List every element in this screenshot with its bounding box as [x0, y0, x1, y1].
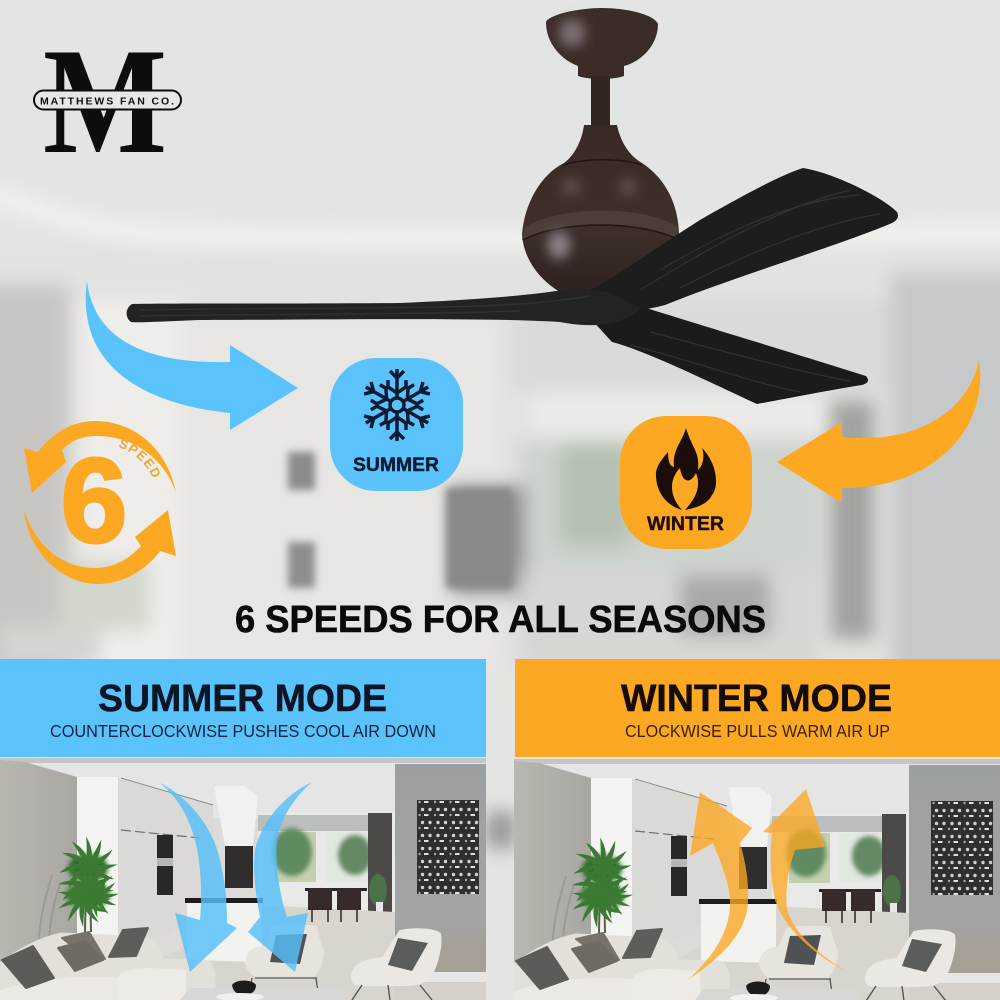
- right blade: [590, 168, 898, 312]
- badge: summer: SUMMER: [353, 455, 439, 476]
- arrows: cool air down: [160, 782, 312, 972]
- icon: flame: [656, 428, 716, 510]
- fan downrod: [591, 76, 610, 126]
- fan blades: [127, 168, 898, 404]
- ceiling fan: [127, 8, 898, 404]
- lower blade: [590, 306, 868, 404]
- summer header: [0, 659, 486, 757]
- summer room scene: [0, 758, 486, 1000]
- winter subheading: CLOCKWISE PULLS WARM AIR UP: [625, 721, 890, 741]
- badge: winter: WINTER: [647, 514, 724, 535]
- title: 6 SPEEDS FOR ALL SEASONS: [235, 599, 766, 641]
- winter room scene: [514, 759, 1000, 1000]
- winter heading: WINTER MODE: [621, 678, 892, 720]
- arrow: winter orange curved: [777, 360, 980, 503]
- logo: Matthews Fan Co.: M: [43, 17, 167, 185]
- badge: summer: [330, 358, 463, 491]
- arrow: top arc: [24, 421, 176, 493]
- arrows: warm air up: [688, 789, 847, 980]
- logo: Matthews Fan Co.: MATTHEWS FAN CO.: [40, 96, 174, 108]
- left blade: [127, 288, 640, 325]
- icon: snowflake: [361, 369, 433, 441]
- badge: winter: [620, 416, 752, 549]
- panel: summer mode: [0, 659, 486, 1000]
- arrow: bottom arc: [24, 510, 176, 584]
- numeral 6: 6: [61, 434, 127, 568]
- icon: 6 speed: [24, 421, 176, 584]
- summer subheading: COUNTERCLOCKWISE PUSHES COOL AIR DOWN: [50, 721, 436, 741]
- panel: winter mode: [514, 659, 1000, 1000]
- winter header: [515, 659, 1000, 757]
- speed label: SPEED: [119, 440, 160, 477]
- arrow: summer blue curved: [86, 281, 298, 430]
- summer heading: SUMMER MODE: [98, 678, 387, 720]
- fan motor housing: [522, 125, 679, 292]
- fan canopy: [546, 8, 658, 79]
